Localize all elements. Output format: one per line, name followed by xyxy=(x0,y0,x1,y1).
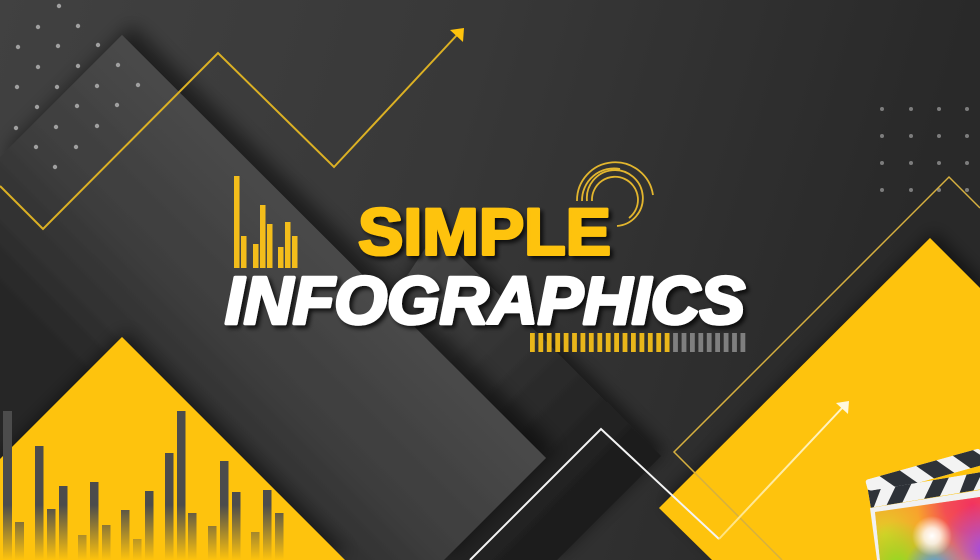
panel: yellow diamond bottom right xyxy=(659,238,980,560)
progress bar xyxy=(530,333,745,352)
yellow outline diamond xyxy=(674,177,980,560)
clapper body frame xyxy=(870,490,980,560)
bar chart: small yellow xyxy=(234,176,298,268)
heading: INFOGRAPHICS: INFOGRAPHICS xyxy=(225,264,745,338)
dot grid: top left xyxy=(14,4,140,169)
bar chart: large fading grey xyxy=(3,411,284,560)
clapper colour screen xyxy=(875,497,980,560)
arrow: white trend line xyxy=(470,401,849,560)
arrow: yellow zigzag trend line xyxy=(0,28,464,229)
icon: clapperboard xyxy=(865,448,980,560)
icon: concentric arcs xyxy=(577,162,653,226)
clapper upper stick xyxy=(866,448,980,492)
dot grid: top right xyxy=(880,107,969,192)
heading: SIMPLE: SIMPLE xyxy=(358,194,611,268)
panel: dark diamond xyxy=(220,232,661,560)
panel: yellow triangle bottom left xyxy=(0,337,345,560)
panel: grey diamond xyxy=(0,35,546,560)
clapper lower stick xyxy=(868,472,980,508)
